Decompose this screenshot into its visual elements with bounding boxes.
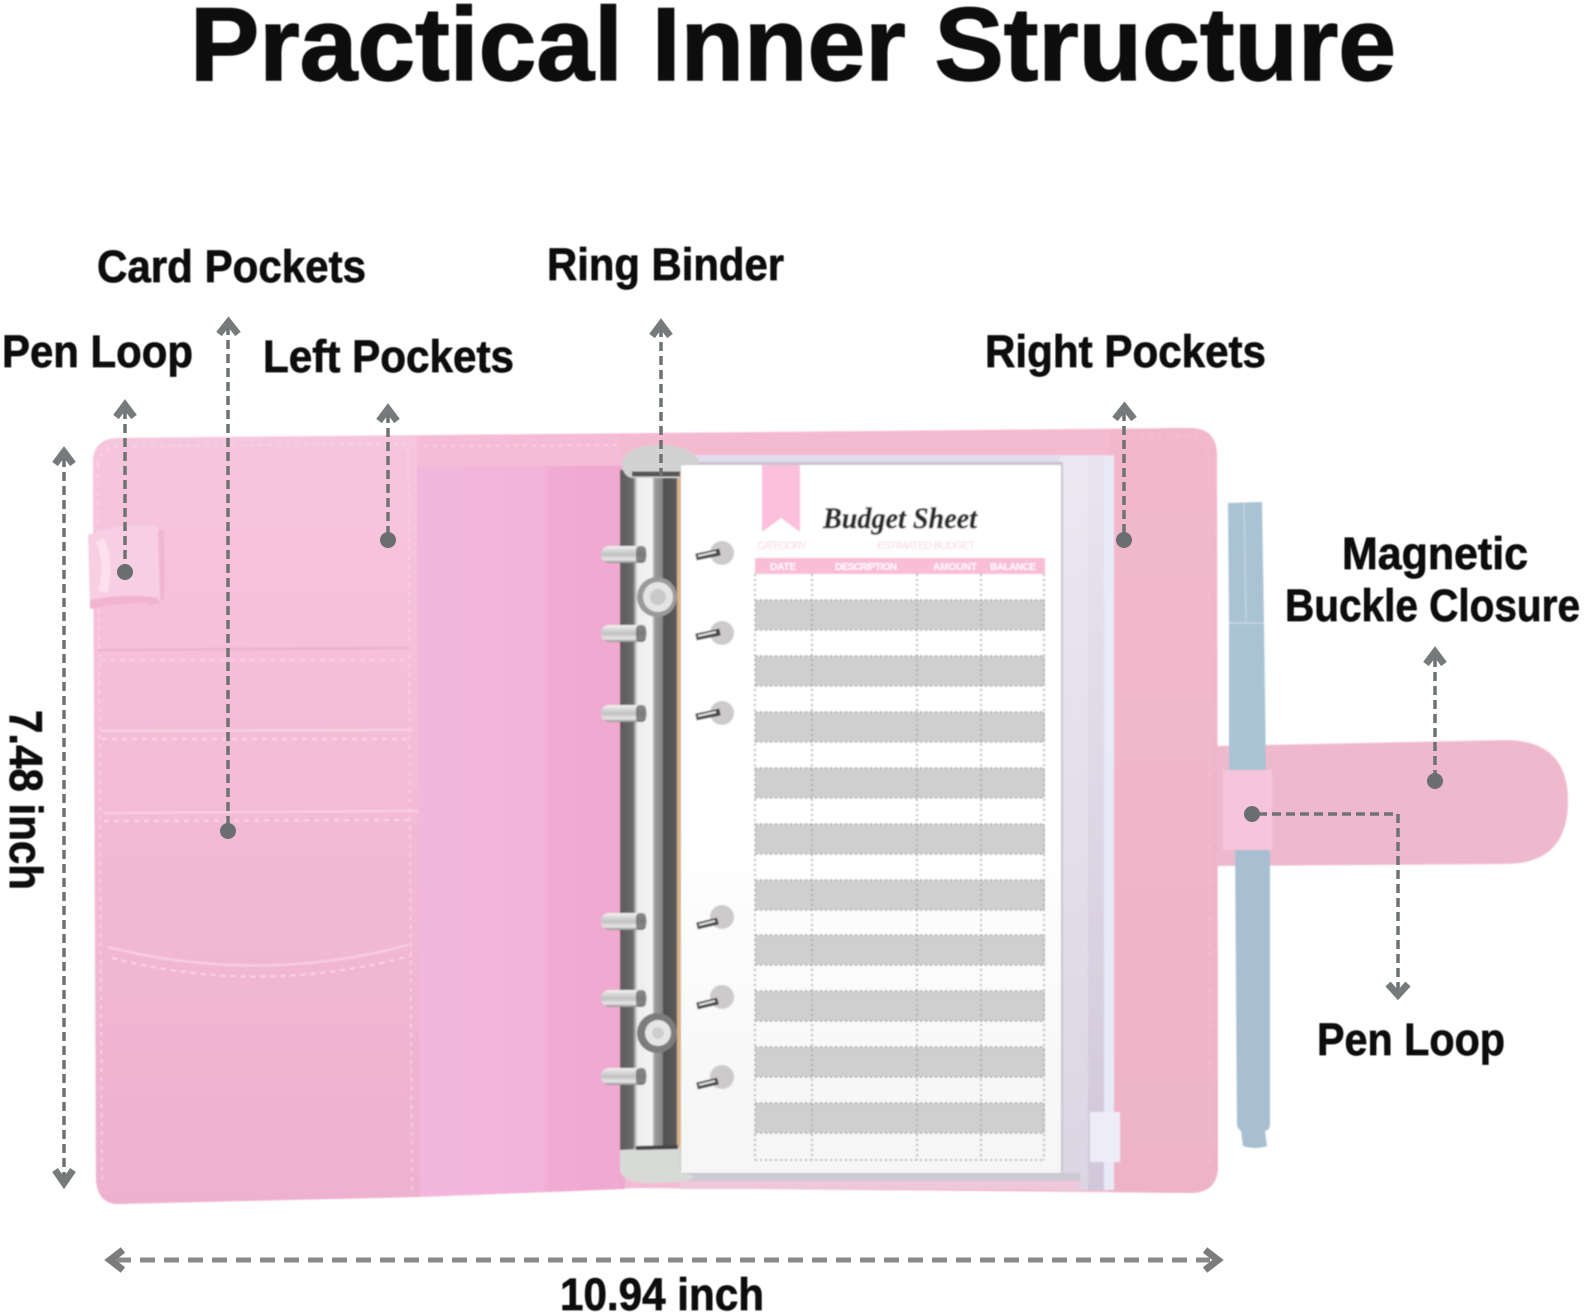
callout: left pockets <box>263 331 514 548</box>
label: Card Pockets <box>97 241 366 292</box>
zip pouch <box>680 455 1120 1190</box>
table header: AMOUNT <box>933 562 977 573</box>
sheet sub-labels: CATEGORY <box>757 540 808 552</box>
top end cap <box>622 445 700 478</box>
label: Magnetic <box>1342 528 1528 579</box>
panel: centre inner pocket <box>417 436 625 1197</box>
callout: right pockets <box>985 326 1266 548</box>
arrow <box>55 452 73 1183</box>
sheet sub-labels <box>757 540 975 552</box>
label <box>1285 528 1580 631</box>
callout: pen loop left <box>2 326 193 580</box>
ring stubs <box>601 546 647 1085</box>
table header: BALANCE <box>990 562 1036 573</box>
pen <box>1228 502 1270 1148</box>
arrow <box>116 405 134 580</box>
label: Left Pockets <box>263 331 514 382</box>
refill sheet: budget sheet <box>679 462 1063 1175</box>
arrow <box>1244 806 1408 995</box>
sheet sub-labels: ESTIMATED BUDGET <box>877 540 975 552</box>
table header: DATE <box>770 562 796 573</box>
label: Ring Binder <box>547 239 784 290</box>
label: Pen Loop <box>2 326 193 377</box>
arrow <box>1426 652 1444 789</box>
callout: card pockets <box>97 241 366 839</box>
table header: DESCRIPTION <box>835 562 897 573</box>
card pocket slots <box>98 648 418 977</box>
pen loop tab <box>88 525 164 609</box>
panel: left pockets <box>88 436 420 1204</box>
ribbon bookmark <box>762 465 800 532</box>
ring binder mechanism <box>601 445 700 1183</box>
sheet heading: Budget Sheet <box>822 502 979 535</box>
panel: right cover <box>620 428 1218 1193</box>
callout: magnetic buckle closure <box>1285 528 1580 789</box>
callout: pen loop right <box>1244 806 1505 1065</box>
magnetic strap <box>1217 740 1568 866</box>
lower rivet <box>637 1013 677 1053</box>
bottom end cap <box>620 1147 695 1183</box>
zip slider <box>1090 1112 1120 1162</box>
label: Right Pockets <box>985 326 1266 377</box>
table rows <box>755 574 1045 1160</box>
punched holes <box>696 541 734 1089</box>
illustration: open pink binder <box>88 428 1568 1204</box>
table header <box>755 558 1045 574</box>
ring stub shadows <box>636 546 646 1085</box>
label: 7.48 inch <box>0 710 52 890</box>
arrow <box>652 324 670 476</box>
binder cover outline <box>93 428 1218 1204</box>
label: Pen Loop <box>1317 1014 1505 1065</box>
dimension: width <box>110 1250 1218 1315</box>
upper rivet <box>637 577 677 617</box>
arrow <box>1115 407 1134 548</box>
callout: ring binder <box>547 239 784 476</box>
arrow <box>379 409 397 548</box>
dimension: height <box>0 452 73 1183</box>
pen loop band <box>1223 770 1272 850</box>
arrow <box>219 322 238 839</box>
arrow <box>110 1250 1218 1270</box>
